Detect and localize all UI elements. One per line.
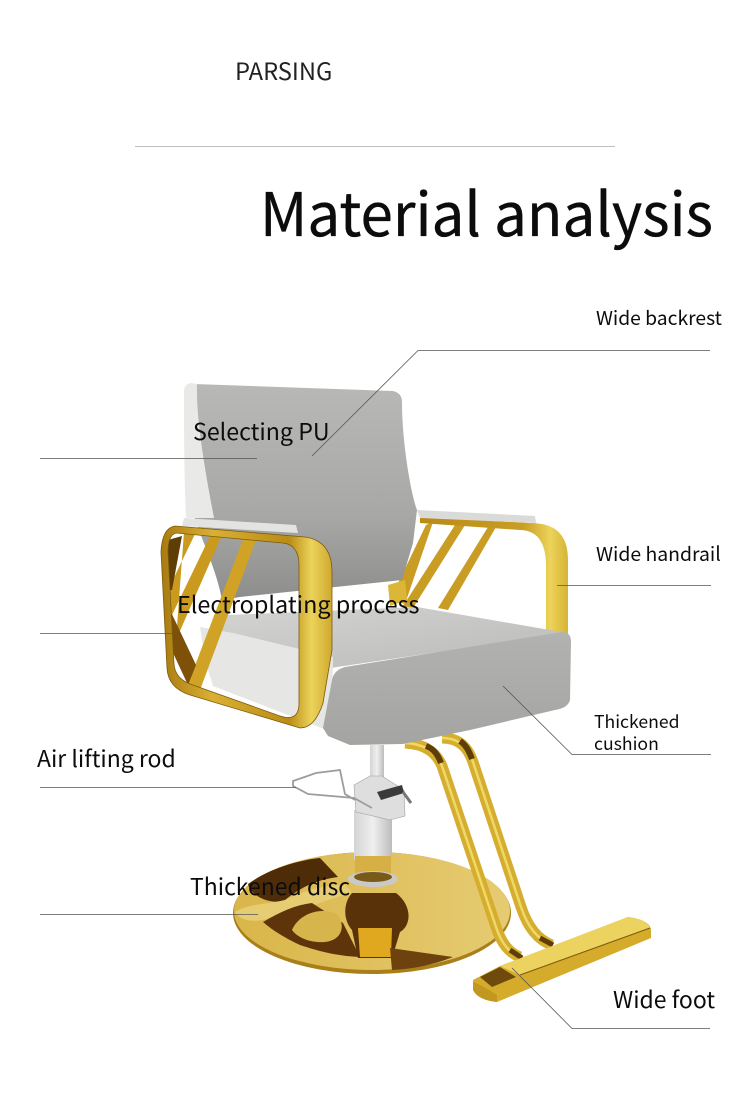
callout: thickened disc: Thickened disc: [190, 868, 350, 902]
callout: thickened cushion: cushion: [594, 731, 659, 756]
left armrest frame: [161, 518, 332, 728]
section label: PARSING: [235, 53, 332, 87]
callout: thickened cushion: [503, 686, 711, 756]
chair illustration: [161, 383, 651, 1002]
backrest: [184, 383, 417, 606]
callout: wide backrest: [312, 303, 722, 456]
callout: wide foot: Wide foot: [613, 981, 715, 1015]
hydraulic column: [348, 745, 405, 887]
callout: air lifting rod: Air lifting rod: [37, 740, 176, 774]
lift handle: [293, 770, 411, 808]
right armrest: [390, 510, 568, 634]
gold foot rails: [405, 738, 553, 958]
title: Material analysis: [260, 167, 713, 254]
callout: electroplating process: Electroplating process: [177, 586, 420, 620]
callout: wide foot: [512, 968, 715, 1028]
callout: wide handrail: Wide handrail: [596, 538, 721, 567]
chair base disc: [233, 852, 511, 974]
callout: wide backrest: Wide backrest: [596, 303, 722, 331]
callout: selecting PU: Selecting PU: [193, 413, 330, 447]
callout: thickened cushion: Thickened: [594, 709, 680, 734]
foot bar: [473, 917, 651, 1002]
seat: [200, 607, 571, 745]
